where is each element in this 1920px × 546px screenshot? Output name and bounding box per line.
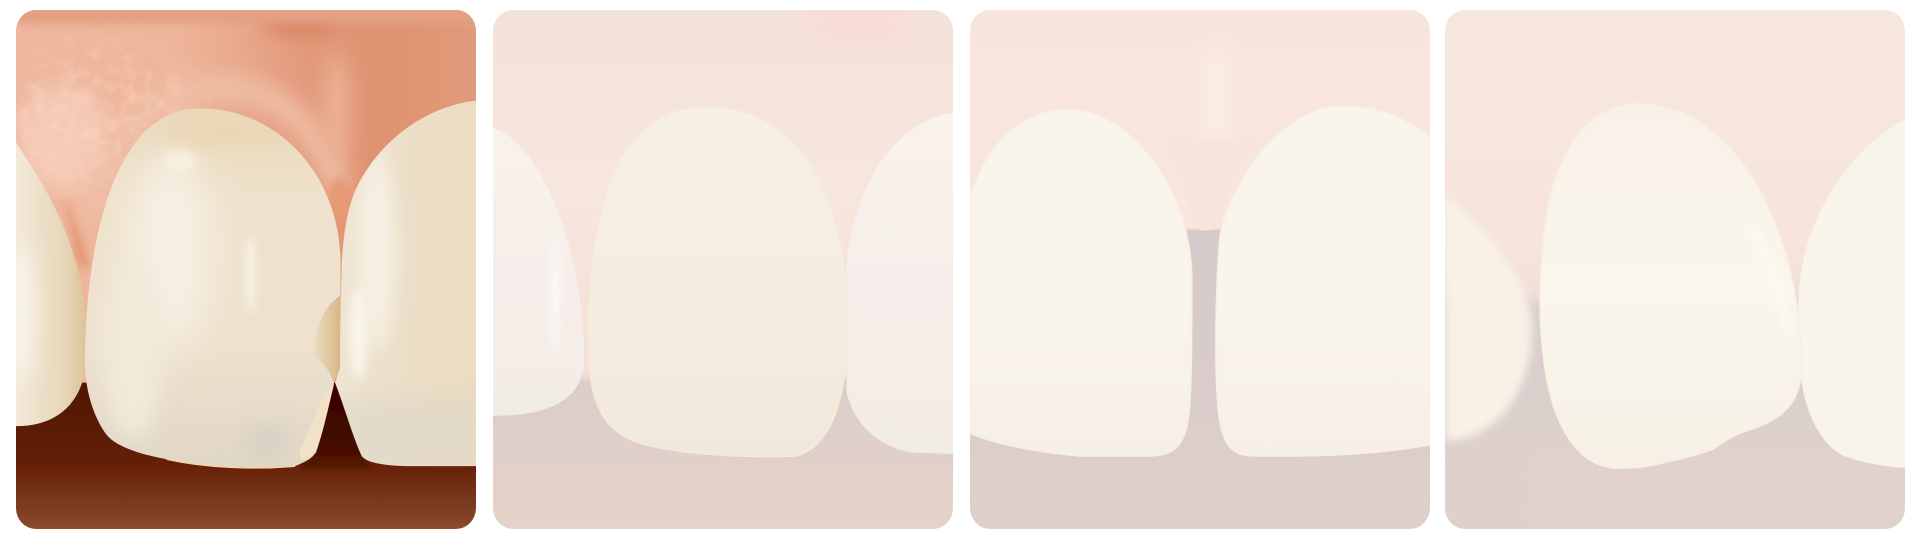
right neighbouring tooth	[846, 113, 953, 454]
right central tooth	[1216, 106, 1430, 456]
left central tooth	[970, 109, 1192, 456]
gum midline frenum	[1214, 88, 1218, 106]
right neighbouring tooth	[1798, 120, 1905, 468]
chipped fragment at edge of tooth	[315, 296, 340, 383]
panel: faded teeth with central gap	[970, 10, 1430, 529]
right neighbouring tooth	[333, 97, 477, 470]
gum blush	[800, 10, 913, 45]
central tooth	[588, 107, 848, 456]
dark gap between teeth	[300, 383, 370, 470]
panel: faded tooth with angled edge	[1445, 10, 1905, 529]
panel: chipped tooth photo	[7, 3, 477, 529]
gum and background	[970, 10, 1430, 529]
lower background	[1530, 452, 1905, 529]
lower background under teeth	[970, 418, 1430, 529]
left neighbouring tooth	[1445, 195, 1532, 441]
gum tissue	[16, 3, 476, 393]
gum and background	[1445, 10, 1905, 529]
left neighbouring tooth	[16, 142, 86, 426]
central chipped tooth	[80, 104, 347, 473]
dark mouth background	[16, 383, 476, 529]
panel: faded restored tooth	[493, 10, 953, 529]
gum and background	[493, 10, 953, 529]
outline highlight on tooth edges	[167, 459, 295, 468]
edge highlight	[1750, 222, 1788, 334]
left neighbouring tooth	[493, 128, 584, 416]
central tooth with angled chip	[1540, 104, 1802, 468]
gum papilla between teeth	[1196, 228, 1214, 230]
lower chip fragment	[299, 384, 334, 461]
